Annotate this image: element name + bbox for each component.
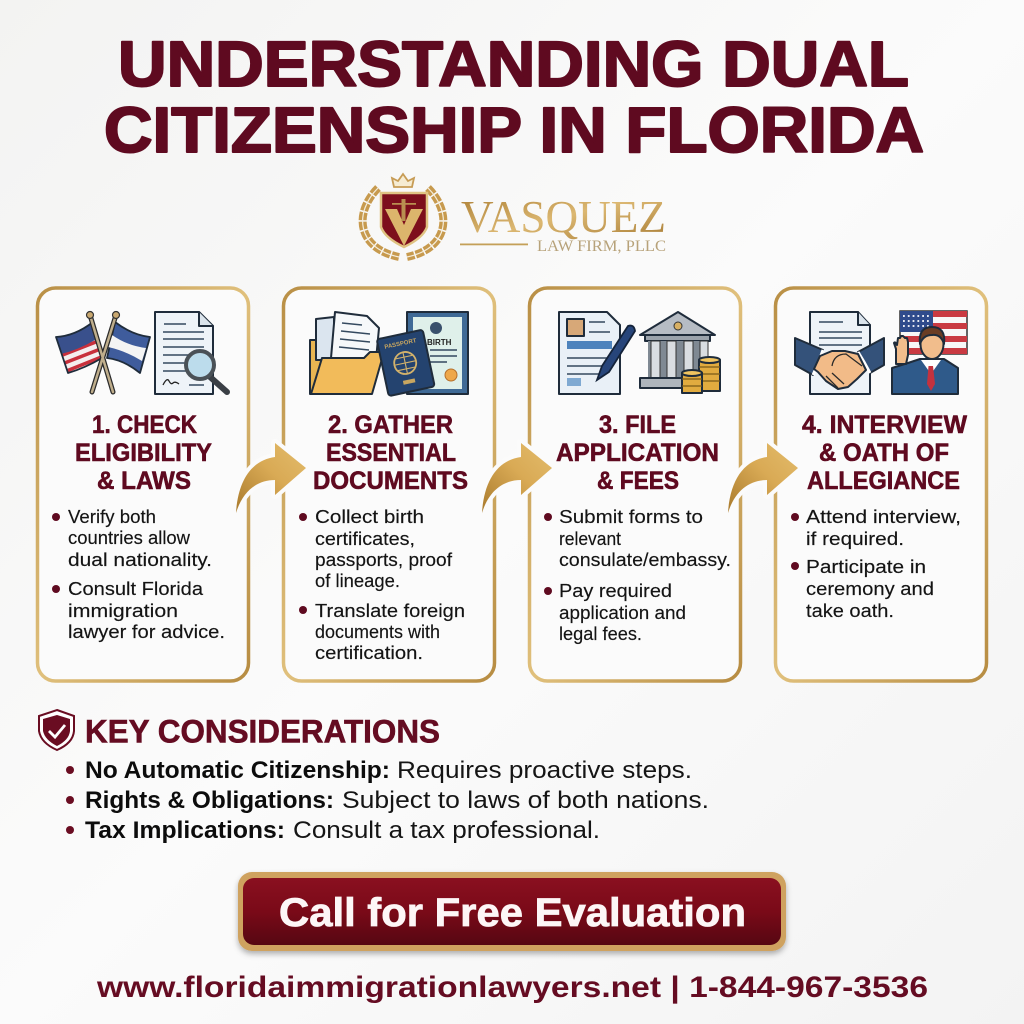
step bullets: legal fees. — [559, 623, 642, 644]
icon: folder with documents — [310, 312, 384, 394]
step heading — [802, 411, 967, 495]
step heading: 3. FILE — [599, 411, 676, 439]
step bullets: consulate/embassy. — [559, 549, 731, 570]
step bullets: Consult Florida — [68, 578, 204, 599]
step bullets: if required. — [806, 528, 904, 549]
list: Subject to laws of both nations. — [342, 787, 709, 814]
call to action button: Call for Free Evaluation — [279, 891, 746, 935]
icon: bank building — [640, 312, 715, 388]
panel: step 3 — [530, 288, 740, 681]
icon: laurel wreath — [363, 188, 443, 257]
icon: document with magnifier — [155, 312, 227, 394]
panel: step 1 — [38, 288, 248, 681]
step bullets — [52, 506, 225, 642]
step heading: APPLICATION — [556, 439, 719, 467]
step bullets: relevant — [559, 528, 621, 549]
step bullets: Collect birth — [315, 506, 424, 527]
step bullets — [544, 506, 731, 644]
list: Rights & Obligations: — [85, 787, 334, 814]
step bullets: certificates, — [315, 528, 415, 549]
icon: birth certificate: BIRTH — [427, 338, 452, 347]
step bullets: lawyer for advice. — [68, 621, 225, 642]
panel border — [284, 288, 494, 681]
arrow: step 3 to 4 — [728, 443, 798, 513]
panel: step 4 — [776, 288, 986, 681]
step bullets: Attend interview, — [806, 506, 961, 527]
icon: crossed flags — [54, 312, 150, 392]
step heading: 4. INTERVIEW — [802, 411, 967, 439]
heading: KEY CONSIDERATIONS — [85, 714, 440, 750]
list: Consult a tax professional. — [293, 817, 600, 844]
logo: Vasquez Law Firm: LAW FIRM, PLLC — [537, 238, 666, 255]
step bullets: ceremony and — [806, 578, 934, 599]
step bullets: countries allow — [68, 527, 191, 548]
arrow: step 2 to 3 — [482, 443, 552, 513]
step bullets: dual nationality. — [68, 549, 212, 570]
step bullets: application and — [559, 602, 686, 623]
step heading: & FEES — [597, 467, 679, 495]
icon: shield with check — [39, 710, 74, 750]
icon: passport: PASSPORT — [384, 338, 417, 351]
wordmark: VASQUEZ — [461, 191, 666, 242]
step bullets: passports, proof — [315, 549, 453, 570]
icon: document and handshake — [795, 312, 884, 394]
panel border — [530, 288, 740, 681]
American flag — [55, 323, 100, 374]
icon: birth certificate — [407, 312, 468, 394]
title: CITIZENSHIP IN FLORIDA — [104, 94, 924, 166]
icon: coin stacks — [682, 357, 720, 393]
step bullets: documents with — [315, 621, 440, 642]
icon: shield — [381, 193, 427, 247]
step heading — [313, 411, 468, 495]
step bullets — [299, 506, 465, 663]
step bullets: immigration — [68, 600, 178, 621]
list: Tax Implications: — [85, 817, 285, 844]
footer contact line: www.floridaimmigrationlawyers.net | 1-844-967-3536 — [96, 971, 928, 1004]
step bullets — [791, 506, 961, 621]
step heading: & LAWS — [97, 467, 191, 495]
call to action button — [238, 872, 786, 951]
arrow: step 1 to 2 — [236, 443, 306, 513]
icon: application form and pen — [559, 312, 635, 394]
step bullets: Submit forms to — [559, 506, 703, 527]
step heading: 2. GATHER — [328, 411, 453, 439]
icon: crown — [392, 174, 414, 187]
step heading — [556, 411, 719, 495]
step bullets: Pay required — [559, 580, 672, 601]
step bullets: certification. — [315, 642, 423, 663]
step heading: 1. CHECK — [92, 411, 197, 439]
logo: Vasquez Law Firm — [363, 174, 666, 257]
step bullets: of lineage. — [315, 570, 400, 591]
step bullets: Translate foreign — [315, 600, 465, 621]
step heading: ESSENTIAL — [326, 439, 456, 467]
step heading: ELIGIBILITY — [75, 439, 212, 467]
step bullets: Participate in — [806, 556, 926, 577]
icon: passport — [377, 330, 435, 396]
title: UNDERSTANDING DUAL — [118, 28, 909, 100]
list: Requires proactive steps. — [397, 757, 692, 784]
step heading: & OATH OF — [819, 439, 949, 467]
list — [66, 757, 709, 844]
blue and white flag — [107, 322, 150, 373]
key considerations — [39, 710, 709, 844]
step heading: DOCUMENTS — [313, 467, 468, 495]
step heading — [75, 411, 212, 495]
panel: step 2 — [284, 288, 494, 681]
title — [104, 28, 924, 166]
list: No Automatic Citizenship: — [85, 757, 390, 784]
icon: American flag — [900, 311, 967, 354]
panel border — [776, 288, 986, 681]
icon: person taking oath — [892, 327, 958, 394]
step heading: ALLEGIANCE — [807, 467, 960, 495]
step bullets: Verify both — [68, 506, 156, 527]
step bullets: take oath. — [806, 600, 894, 621]
panel border — [38, 288, 248, 681]
